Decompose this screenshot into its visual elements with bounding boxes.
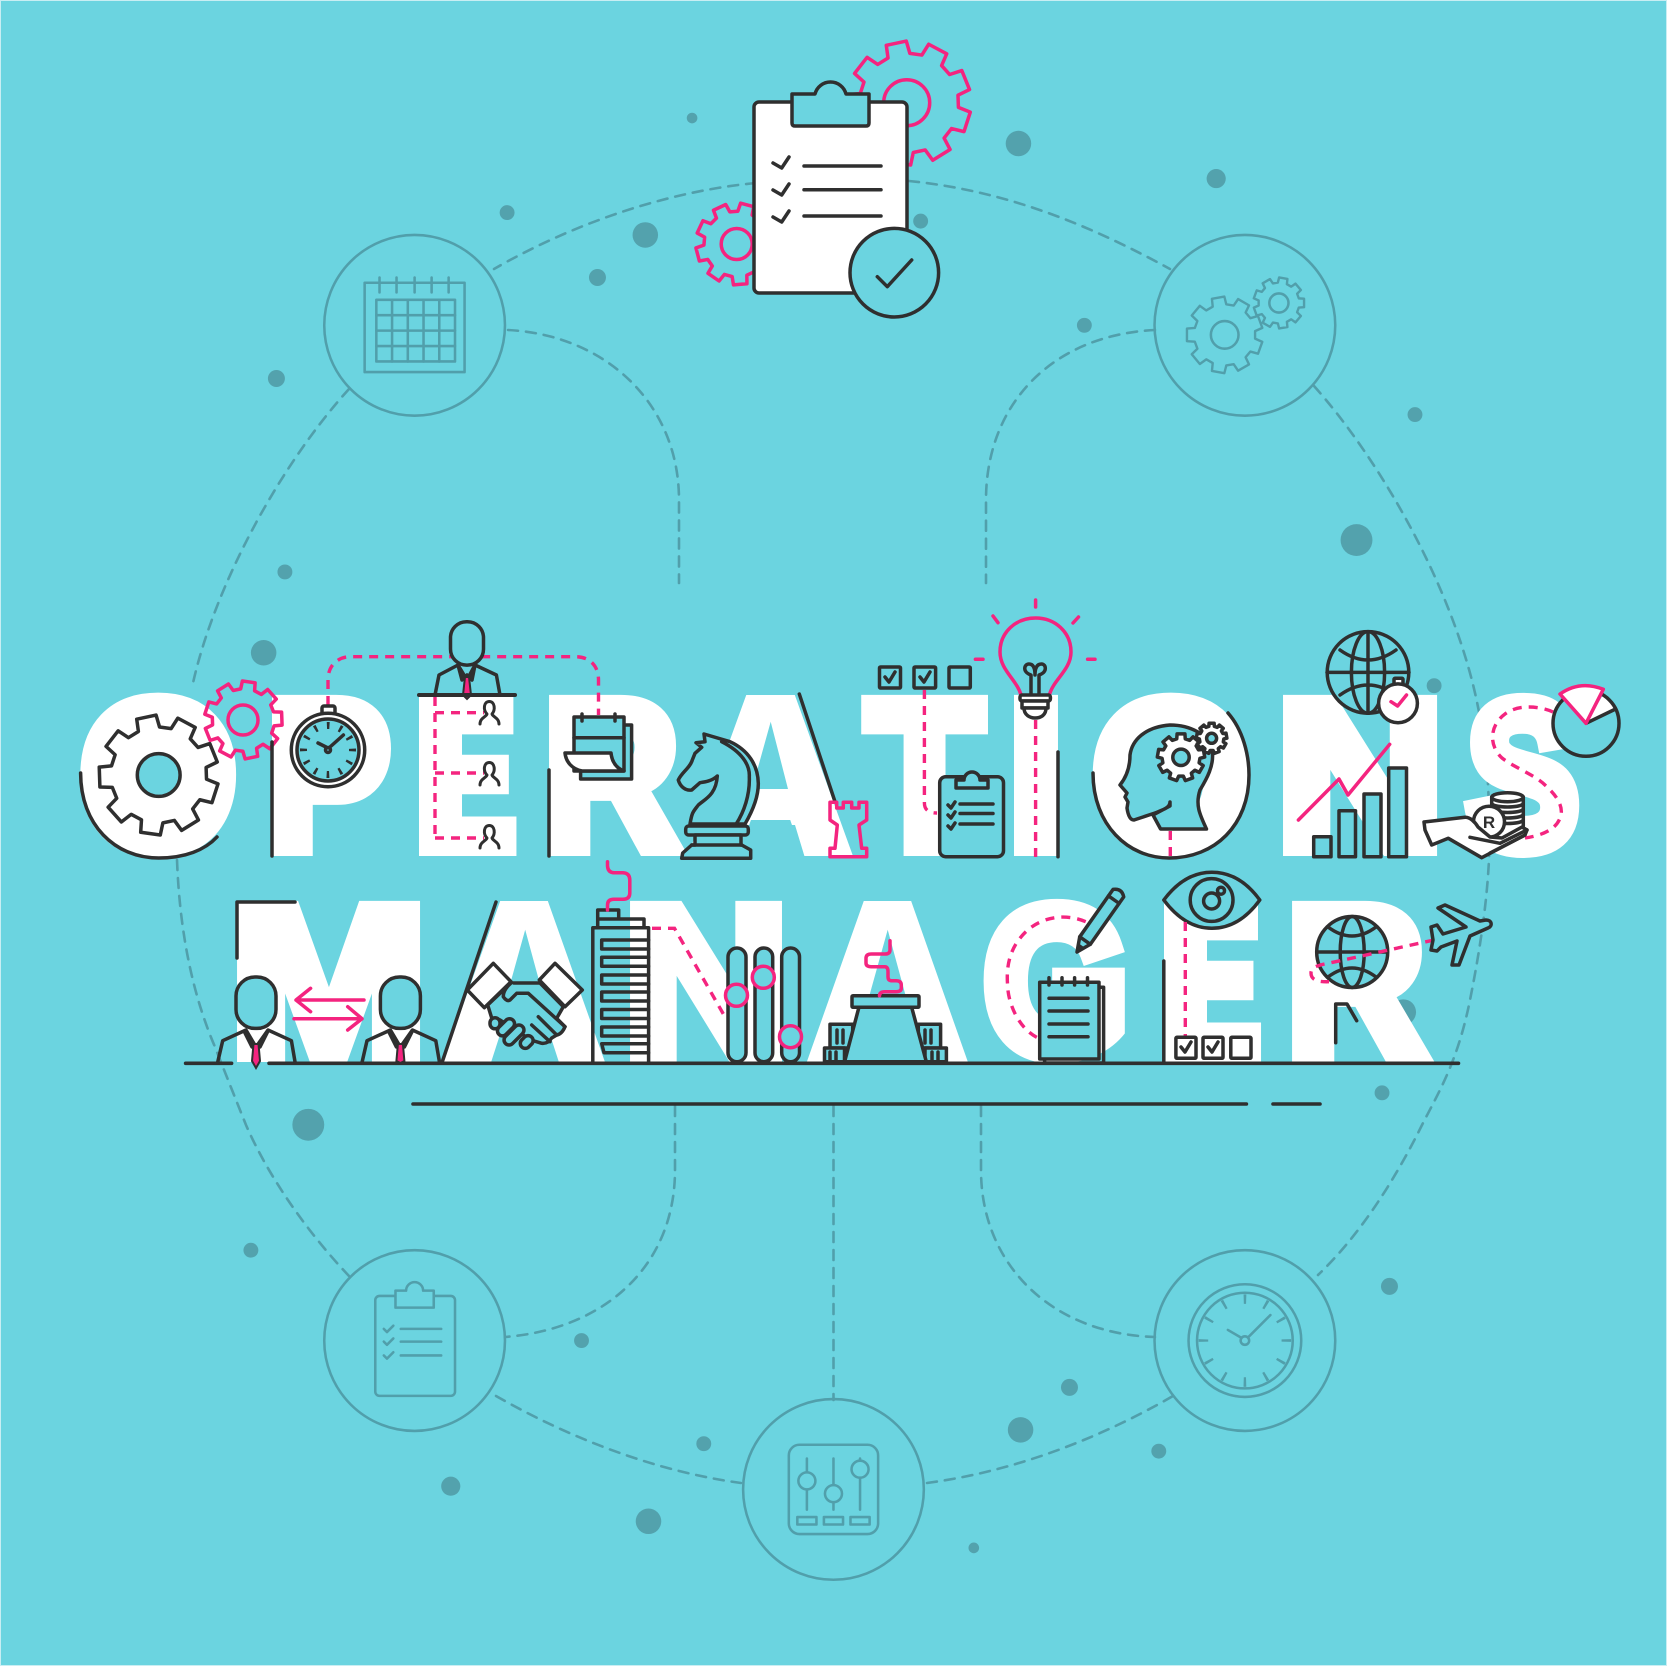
heading: OPERATIONS: P <box>267 658 390 894</box>
heading: OPERATIONS: I <box>1008 657 1064 893</box>
icon: gear <box>88 705 230 845</box>
icon: manager figure <box>419 622 515 699</box>
I dashes and line <box>1036 720 1058 857</box>
heading: OPERATIONS: N <box>1276 658 1444 894</box>
E org chart dashes <box>435 697 484 838</box>
approval badge <box>850 228 939 317</box>
P stem line <box>270 742 274 856</box>
letter A counters <box>490 722 922 1064</box>
icon: checklist clipboard <box>324 1250 505 1431</box>
icon: pink rook <box>830 802 867 857</box>
icon: hand with coins: R <box>1483 813 1495 832</box>
heading: OPERATIONS: E <box>415 657 517 893</box>
heading: OPERATIONS: O <box>80 657 237 893</box>
heading: MANAGER: A <box>816 866 959 1096</box>
icon: clipboard <box>940 772 1004 857</box>
heading: MANAGER: M <box>230 864 427 1099</box>
checklist <box>773 157 881 222</box>
icon: staff figures <box>480 702 499 848</box>
heading: MANAGER: N <box>623 863 789 1099</box>
icon: two businessmen <box>218 977 439 1068</box>
heading: MANAGER: E <box>1160 863 1261 1099</box>
OPERATIONS line illustrations <box>81 600 1619 858</box>
icon: gears <box>1155 235 1335 416</box>
icon: bar chart with trend <box>1298 744 1406 857</box>
icon: containers and crane table <box>824 996 946 1062</box>
icon: slider bars <box>726 948 802 1062</box>
heading: MANAGER: G <box>985 867 1127 1096</box>
decorative dots <box>243 113 1442 1553</box>
icon: checkboxes <box>1176 1037 1251 1058</box>
R inner line <box>1336 1004 1357 1043</box>
heading: MANAGER: A <box>452 867 596 1096</box>
icon: handshake <box>467 963 582 1050</box>
icon: calendar <box>324 235 505 416</box>
outline of second O <box>1093 713 1249 858</box>
icon: pie chart <box>1553 686 1619 756</box>
icon: airplane <box>1431 905 1491 965</box>
heading: OPERATIONS: S <box>1468 662 1578 890</box>
letter E stem thickening <box>419 695 1207 1062</box>
top clipboard illustration <box>687 30 982 317</box>
heading: OPERATIONS: T <box>866 657 983 893</box>
N dashes <box>652 928 726 1018</box>
heading: MANAGER: R <box>1286 863 1425 1099</box>
icon: office tower <box>593 910 649 1062</box>
icon: pencil <box>1072 887 1125 956</box>
ground lines <box>186 1063 1459 1104</box>
M corner line <box>237 902 295 958</box>
E stem line <box>1162 961 1166 1062</box>
clipboard sheet <box>754 102 907 293</box>
icon: globe with timer <box>1327 632 1417 723</box>
A side line <box>442 902 496 1062</box>
icon: notepad calendar <box>565 714 632 779</box>
S dashed route <box>1493 707 1561 838</box>
icon: stopwatch <box>291 706 365 787</box>
icon: checkboxes <box>880 667 970 688</box>
icon: hand with coins <box>1424 793 1527 858</box>
clipboard clip <box>792 82 869 126</box>
icon: clock <box>1155 1250 1335 1431</box>
A side line <box>799 694 835 802</box>
dashed connector network <box>177 181 1490 1483</box>
outline of first O <box>81 773 217 858</box>
pink antenna squiggle <box>608 862 630 910</box>
heading: OPERATIONS: R <box>544 658 679 893</box>
E dashes <box>1184 922 1187 1038</box>
icon: pink gear <box>199 676 287 763</box>
icon: sliders <box>743 1399 924 1580</box>
heading: OPERATIONS: O <box>1092 657 1250 893</box>
icon: notepad <box>1040 978 1104 1063</box>
G dashes <box>1007 917 1086 1038</box>
pink flight path <box>1311 940 1434 982</box>
icon: pink gears <box>687 30 982 294</box>
T dashes <box>924 690 937 813</box>
heading: OPERATIONS: A <box>697 661 844 890</box>
icon: chess knight <box>678 734 758 858</box>
icon: eye <box>1164 872 1260 928</box>
icon: globe <box>1317 916 1388 988</box>
pink steam squiggle <box>866 941 901 996</box>
icon: light bulb <box>975 600 1095 718</box>
heading: OPERATIONS <box>80 657 1578 894</box>
icon: head with gears <box>1120 723 1227 857</box>
MANAGER line illustrations <box>186 862 1491 1104</box>
muted outlined icon circles <box>324 235 1335 1580</box>
pink dashed route <box>328 657 598 715</box>
R stem line <box>547 770 551 856</box>
heading: MANAGER <box>230 863 1425 1099</box>
